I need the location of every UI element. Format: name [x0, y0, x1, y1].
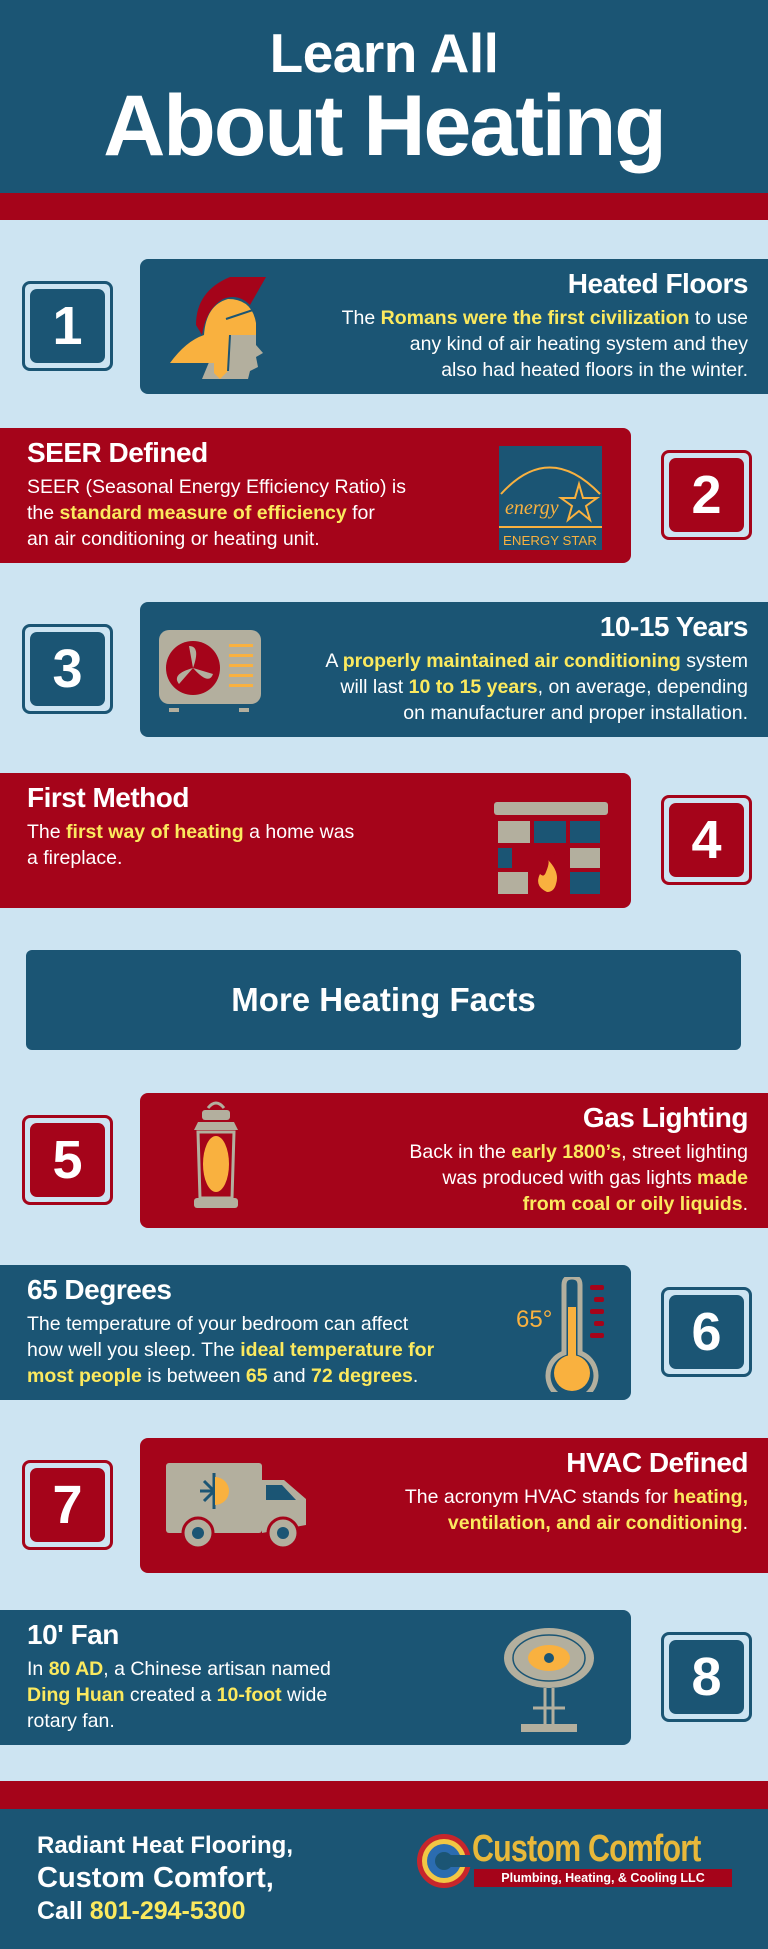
number 7 [22, 1460, 113, 1550]
number 8: 8 [691, 1647, 722, 1707]
panel: gas lighting: Back in the early 1800’s, street lighting [409, 1141, 748, 1163]
panel: HVAC defined: ventilation, and air conditioning. [448, 1512, 748, 1534]
icon: energy star: energy [505, 497, 559, 519]
body: any kind of air heating system and they [410, 333, 748, 355]
logo: custom comfort: Custom Comfort [472, 1828, 701, 1870]
body [342, 307, 748, 381]
footer text: Custom Comfort, [37, 1862, 274, 1894]
title [103, 22, 665, 174]
panel: first method: The first way of heating a home was [27, 821, 354, 843]
body: The Romans were the first civilization to use [342, 307, 748, 329]
panel: first method: First Method [27, 782, 189, 813]
panel: HVAC defined [140, 1438, 768, 1573]
icon: fireplace [494, 802, 608, 894]
number 6 [661, 1287, 752, 1377]
footer [0, 1781, 768, 1809]
body: also had heated floors in the winter. [441, 359, 748, 381]
heading: Heated Floors [568, 268, 748, 299]
number 7: 7 [52, 1475, 83, 1535]
panel: 10-15 years: will last 10 to 15 years, on average, depending [340, 676, 748, 698]
section heading: more heating facts: More Heating Facts [231, 981, 536, 1018]
icon: truck [166, 1463, 306, 1546]
panel: first method [0, 773, 631, 908]
number 4 [661, 795, 752, 885]
panel: 65 degrees: most people is between 65 and 72 degrees. [27, 1365, 418, 1387]
number 2 [661, 450, 752, 540]
panel: SEER defined: an air conditioning or heating unit. [27, 528, 320, 550]
panel: 10' fan [0, 1610, 631, 1745]
panel: SEER defined: SEER (Seasonal Energy Efficiency Ratio) is [27, 476, 406, 498]
header [0, 0, 768, 193]
panel: 10' fan: 10' Fan [27, 1619, 119, 1650]
icon: rotary fan [504, 1628, 594, 1732]
panel: gas lighting [140, 1093, 768, 1228]
panel: SEER defined: the standard measure of efficiency for [27, 502, 375, 524]
section heading: more heating facts [26, 950, 741, 1050]
number 4: 4 [691, 810, 722, 870]
panel: gas lighting: was produced with gas lights made [442, 1167, 748, 1189]
number 3 [22, 624, 113, 714]
panel: heated floors [140, 259, 768, 394]
panel: HVAC defined: HVAC Defined [566, 1447, 748, 1478]
icon: roman helmet [170, 277, 266, 379]
title: About Heating [103, 78, 665, 174]
panel: first method: a fireplace. [27, 847, 122, 869]
footer text: Call 801-294-5300 [37, 1897, 246, 1925]
panel: gas lighting: from coal or oily liquids. [523, 1193, 748, 1215]
footer text [37, 1832, 293, 1925]
icon: ac unit [159, 630, 261, 712]
panel: HVAC defined: The acronym HVAC stands for heating, [405, 1486, 748, 1508]
number 1: 1 [52, 296, 83, 356]
number 5 [22, 1115, 113, 1205]
panel: SEER defined [0, 428, 631, 563]
icon: thermometer [516, 1277, 604, 1392]
panel: 10-15 years: on manufacturer and proper installation. [403, 702, 748, 724]
panel: gas lighting: Gas Lighting [583, 1102, 748, 1133]
panel: 65 degrees [0, 1265, 631, 1400]
panel: 65 degrees: how well you sleep. The ideal temperature for [27, 1339, 434, 1361]
number 1 [22, 281, 113, 371]
icon: lantern [194, 1102, 238, 1208]
number 5: 5 [52, 1130, 83, 1190]
logo: custom comfort [417, 1828, 732, 1888]
icon: energy star [499, 446, 602, 550]
title: Learn All [270, 22, 498, 84]
panel: 10-15 years: A properly maintained air conditioning system [325, 650, 748, 672]
number 3: 3 [52, 639, 83, 699]
number 8 [661, 1632, 752, 1722]
logo: custom comfort: Plumbing, Heating, & Cooling LLC [501, 1871, 705, 1885]
footer text: Radiant Heat Flooring, [37, 1832, 293, 1859]
panel: 10-15 years [140, 602, 768, 737]
panel: 10' fan: rotary fan. [27, 1710, 115, 1732]
panel: 65 degrees: The temperature of your bedroom can affect [27, 1313, 408, 1335]
panel: SEER defined: SEER Defined [27, 437, 208, 468]
number 6: 6 [691, 1302, 722, 1362]
panel: 10-15 years: 10-15 Years [600, 611, 748, 642]
icon: energy star: ENERGY STAR [503, 533, 597, 548]
panel: 10' fan: Ding Huan created a 10-foot wide [27, 1684, 327, 1706]
panel: 10' fan: In 80 AD, a Chinese artisan named [27, 1658, 331, 1680]
icon: thermometer: 65° [516, 1306, 552, 1333]
number 2: 2 [691, 465, 722, 525]
panel: 65 degrees: 65 Degrees [27, 1274, 171, 1305]
